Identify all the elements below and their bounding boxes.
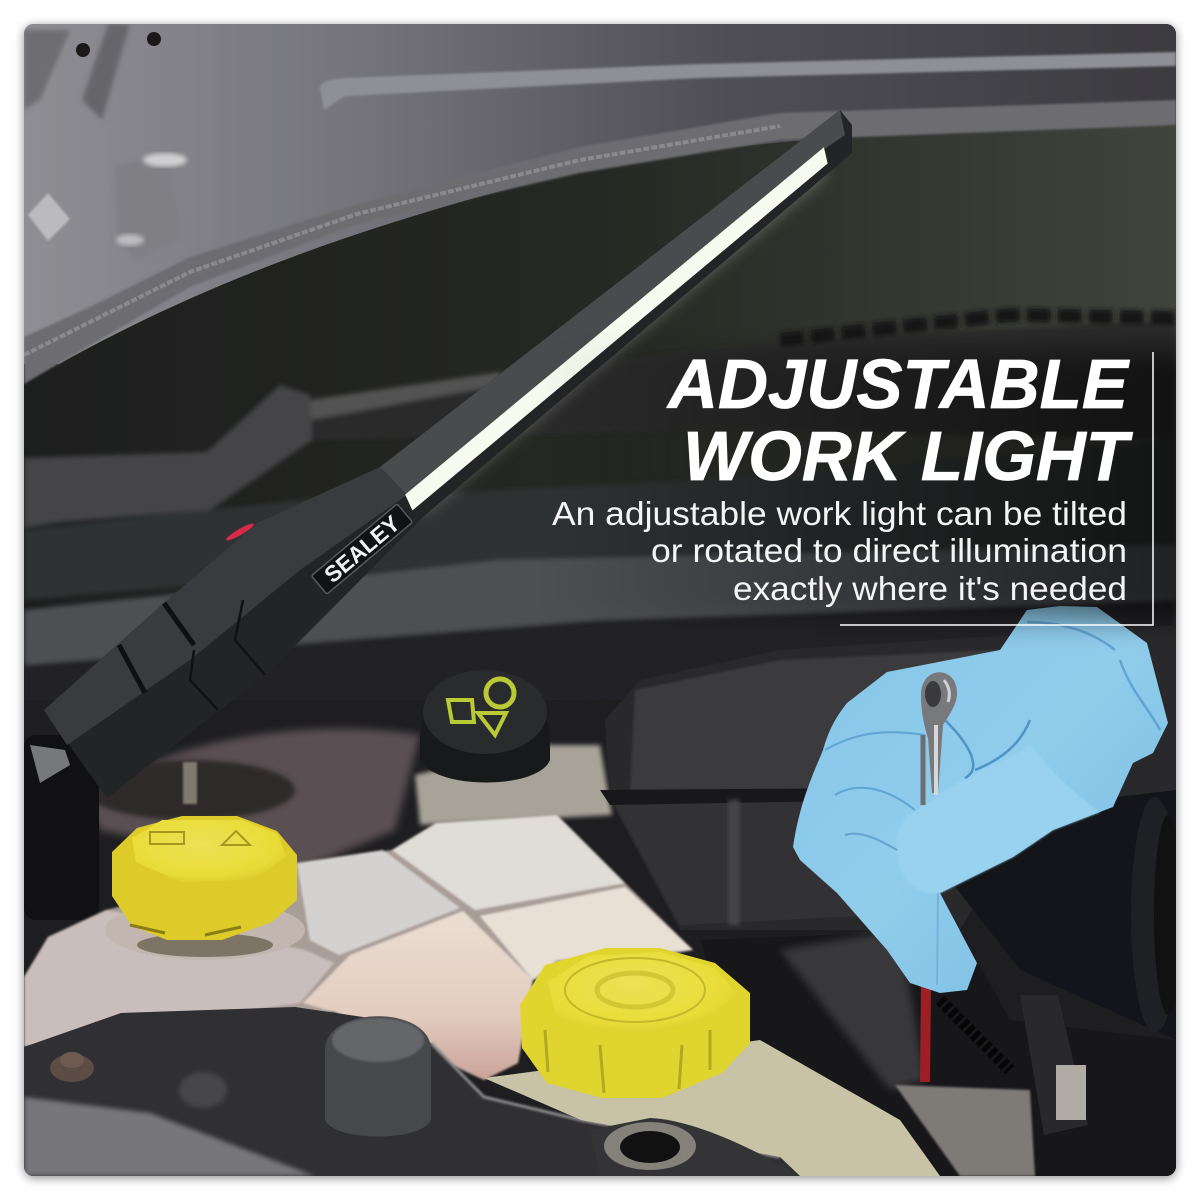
tank mid lobe [297,850,460,955]
black reservoir cap with green symbols [420,670,550,782]
corner frame lines [840,352,1153,625]
heading [666,358,1134,481]
blue gloved hand [793,606,1168,993]
red ratchet shaft [925,985,926,1082]
description text: or rotated to direct illumination [651,532,1127,569]
lamp top facet [380,110,845,495]
heading: ADJUSTABLE [666,345,1130,423]
finger creases [825,732,925,850]
engine bay [24,700,1176,1180]
light strip [407,150,826,508]
description text: exactly where it's needed [733,570,1127,607]
glove cuff shading [1027,622,1160,730]
car hood underside [24,24,1176,364]
tank right lobe [480,887,693,980]
lamp body [44,110,852,798]
heading: WORK LIGHT [683,417,1133,495]
lower right engine parts [783,933,1176,1176]
handle top facet [44,467,407,745]
wiper arm and scuttle [24,306,1176,668]
tank centre lobe [303,911,533,1080]
ratchet tool [921,672,957,805]
black airbox [600,625,1176,930]
yellow cap left [105,816,305,960]
work light: SEALEY [319,510,405,588]
tank left body [24,910,334,1047]
lamp glow [415,165,820,505]
dark shade behind copy [540,350,1200,620]
black intake hose [950,790,1182,1040]
red indicator [226,524,254,540]
brand badge [311,504,413,594]
yellow cap right [520,948,750,1098]
thumb [896,745,1100,893]
tank upper lobe [392,815,625,910]
work light [44,110,852,798]
coolant tank [24,815,693,1080]
description text: An adjustable work light can be tilted [552,495,1127,532]
hood edge seal [24,100,1176,384]
lower black shroud [24,1007,800,1176]
pale expansion bottle [484,1040,940,1176]
tank base [106,848,692,1079]
brake fluid reservoir [415,745,612,825]
description text [552,495,1127,607]
windscreen [24,125,1176,640]
